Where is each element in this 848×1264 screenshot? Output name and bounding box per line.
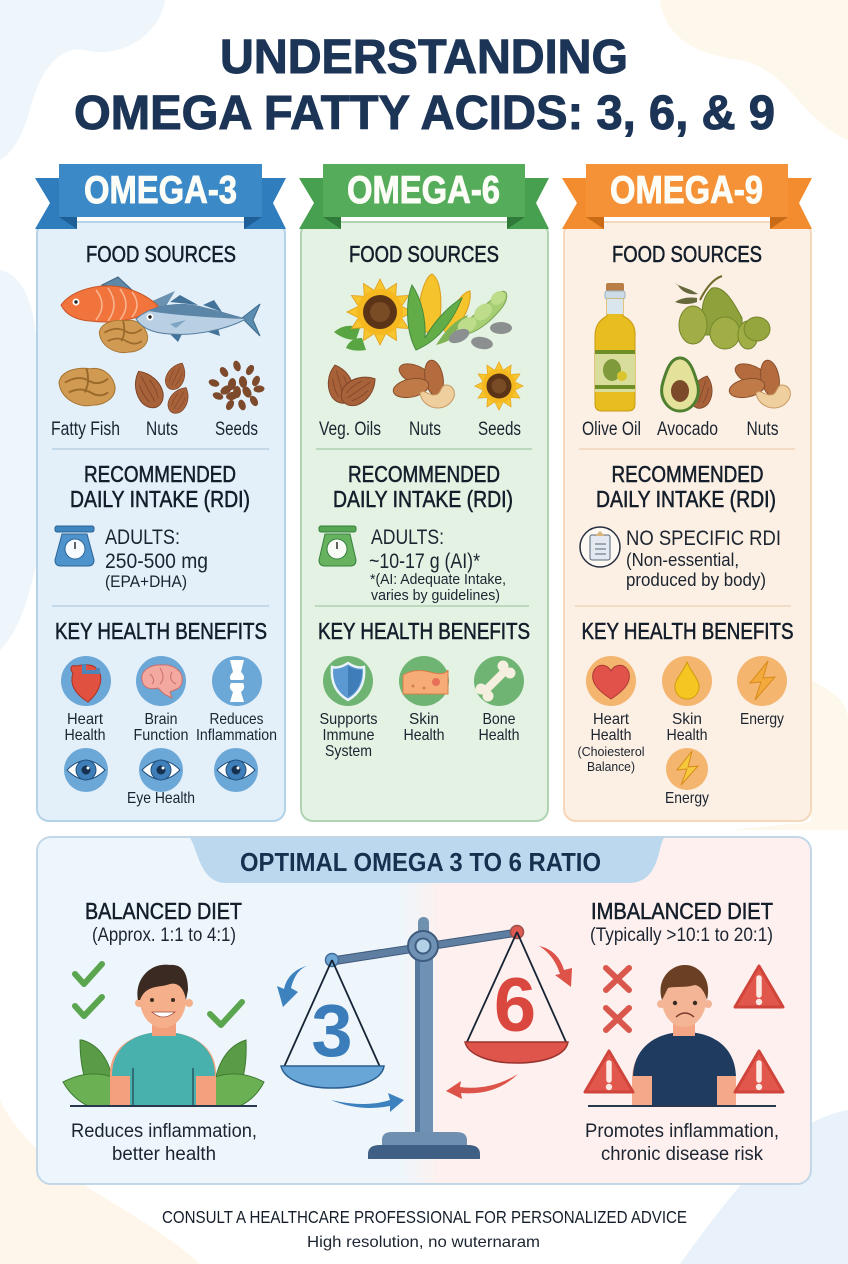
- icon: leaves: [63, 1040, 264, 1106]
- benefit labels: System: [325, 743, 372, 760]
- rdi text: (EPA+DHA): [105, 572, 187, 591]
- icon: joint: [212, 656, 262, 706]
- icon: walnut pile: [99, 320, 148, 353]
- food labels: Veg. Oils: [319, 419, 381, 440]
- heading: recommended daily intake: [70, 461, 250, 512]
- icon: heart: [61, 656, 111, 706]
- icon: energy small: [666, 748, 708, 790]
- food labels: Nuts: [146, 419, 178, 440]
- icon: brain: [136, 656, 186, 706]
- heading: key health benefits: KEY HEALTH BENEFITS: [55, 618, 267, 644]
- heading: food sources: FOOD SOURCES: [612, 241, 762, 267]
- icon: nuts: [728, 359, 790, 408]
- icon: sunflower: [475, 362, 523, 410]
- benefit labels: Supports: [320, 711, 378, 728]
- heading: recommended daily intake: RECOMMENDED: [84, 461, 236, 487]
- ribbon: omega-3: [35, 164, 286, 229]
- heading: key health benefits: KEY HEALTH BENEFITS: [318, 618, 530, 644]
- food labels: Nuts: [746, 419, 778, 440]
- benefit labels: Heart: [593, 711, 630, 728]
- balanced caption: better health: [112, 1144, 216, 1165]
- ribbon: omega-6: [299, 164, 549, 229]
- icons: warning triangles: [585, 966, 783, 1092]
- icon: salmon: [61, 277, 175, 322]
- benefit labels: Inflammation: [196, 727, 277, 744]
- tab: ratio heading: [190, 838, 664, 883]
- footer note: CONSULT A HEALTHCARE PROFESSIONAL FOR PERSONALIZED ADVICE: [162, 1207, 687, 1227]
- rdi text: ADULTS:: [105, 526, 180, 549]
- icons: check marks: [75, 964, 242, 1025]
- benefit labels: [64, 711, 277, 744]
- benefit labels: Health: [404, 727, 444, 744]
- rdi text: ADULTS:: [371, 526, 444, 549]
- imbalanced caption: [585, 1121, 779, 1165]
- panel: omega-6: [299, 164, 549, 821]
- panel: omega ratio: [37, 837, 811, 1184]
- footer note: High resolution, no wuternaram: [307, 1234, 540, 1251]
- heading: food sources: FOOD SOURCES: [86, 241, 236, 267]
- benefit labels: Brain: [144, 711, 178, 728]
- benefit labels: Reduces: [210, 711, 264, 728]
- icon: nuts: [392, 359, 454, 408]
- icon: skin: [399, 656, 449, 706]
- benefit labels: Health: [590, 727, 632, 744]
- icon: walnut: [59, 368, 115, 406]
- heading: food sources: FOOD SOURCES: [349, 241, 499, 267]
- benefit labels: Health: [64, 727, 106, 744]
- label: energy: Energy: [665, 790, 709, 807]
- rdi text: NO SPECIFIC RDI: [626, 527, 781, 550]
- benefit labels: Balance): [587, 759, 635, 774]
- food labels: Seeds: [478, 419, 521, 440]
- ribbon: omega-3: OMEGA-3: [84, 169, 237, 212]
- rdi text: [626, 527, 781, 590]
- heading: recommended daily intake: RECOMMENDED: [612, 461, 764, 487]
- panel: omega-9: [562, 164, 812, 821]
- balanced diet heading: BALANCED DIET: [85, 898, 242, 924]
- icon: bean pod and seeds: [446, 288, 512, 351]
- icons: crosses: [606, 968, 629, 1030]
- heading: recommended daily intake: DAILY INTAKE (RDI): [70, 486, 250, 512]
- benefit labels: Health: [666, 727, 708, 744]
- benefit labels: [320, 711, 520, 760]
- heading: key health benefits: KEY HEALTH BENEFITS: [582, 618, 794, 644]
- balanced diet heading: [85, 898, 242, 946]
- benefit labels: Function: [134, 727, 188, 744]
- benefit labels: Bone: [482, 711, 516, 728]
- benefit labels: Energy: [740, 711, 784, 728]
- icon: weighing scale: [319, 526, 356, 566]
- benefit labels: Health: [478, 727, 520, 744]
- heading: recommended daily intake: RECOMMENDED: [348, 461, 500, 487]
- benefit labels: Heart: [67, 711, 104, 728]
- heading: recommended daily intake: [596, 461, 776, 512]
- icon: unhappy person: [632, 965, 736, 1106]
- imbalanced diet heading: (Typically >10:1 to 20:1): [590, 925, 773, 946]
- right pan: [465, 932, 568, 1063]
- icon: clipboard: [580, 527, 620, 567]
- food labels: [319, 419, 521, 440]
- icon: weighing scale: [55, 526, 94, 566]
- rdi text: *(AI: Adequate Intake,: [370, 572, 506, 588]
- benefit labels: Skin: [672, 711, 702, 728]
- icon: corn: [408, 274, 470, 350]
- label: eye health: Eye Health: [127, 790, 195, 807]
- right pan: 6: [494, 963, 536, 1048]
- heading: recommended daily intake: DAILY INTAKE (RDI): [333, 486, 513, 512]
- rdi text: (Non-essential,: [626, 550, 739, 570]
- icon: nuts: [128, 359, 194, 417]
- benefit labels: Skin: [409, 711, 439, 728]
- rdi text: 250-500 mg: [105, 550, 208, 573]
- tab: ratio heading: OPTIMAL OMEGA 3 TO 6 RATIO: [240, 847, 601, 877]
- icon: seeds: [208, 360, 265, 412]
- left pan: [281, 960, 384, 1088]
- imbalanced caption: Promotes inflammation,: [585, 1121, 779, 1142]
- icon: olive oil bottle: [595, 283, 635, 411]
- ribbon: omega-9: [562, 164, 812, 229]
- icon: happy person: [110, 965, 216, 1106]
- rdi text: [369, 526, 506, 604]
- rdi text: produced by body): [626, 570, 766, 590]
- food labels: [51, 419, 258, 440]
- imbalanced diet heading: IMBALANCED DIET: [591, 898, 773, 924]
- food labels: Avocado: [657, 419, 718, 440]
- icon: energy: [737, 656, 787, 706]
- arrows: blue: [277, 965, 404, 1112]
- ribbon: omega-6: OMEGA-6: [347, 169, 500, 212]
- heading: recommended daily intake: [333, 461, 513, 512]
- title: [74, 31, 775, 140]
- rdi text: ~10-17 g (AI)*: [369, 550, 480, 573]
- ribbon: omega-9: OMEGA-9: [610, 169, 763, 212]
- food labels: Seeds: [215, 419, 258, 440]
- heading: recommended daily intake: DAILY INTAKE (RDI): [596, 486, 776, 512]
- imbalanced diet heading: [590, 898, 773, 946]
- icon: oil drop: [662, 656, 712, 706]
- icon: sunflower with leaves: [334, 279, 413, 351]
- left pan: 3: [311, 989, 353, 1072]
- food labels: Olive Oil: [582, 419, 641, 440]
- title: OMEGA FATTY ACIDS: 3, 6, & 9: [74, 87, 775, 140]
- icon: mackerel: [136, 295, 260, 342]
- icon: heart: [586, 656, 636, 706]
- panel: omega-3: [35, 164, 286, 821]
- food labels: Nuts: [409, 419, 441, 440]
- food labels: [582, 419, 778, 440]
- icon: olives: [675, 276, 770, 349]
- icon: shield: [323, 656, 373, 706]
- imbalanced caption: chronic disease risk: [601, 1144, 763, 1165]
- icons: eyes: [64, 748, 258, 792]
- title: UNDERSTANDING: [220, 31, 628, 84]
- food labels: Fatty Fish: [51, 419, 120, 440]
- balanced caption: Reduces inflammation,: [71, 1121, 257, 1142]
- benefit labels: Immune: [322, 727, 375, 744]
- balanced diet heading: (Approx. 1:1 to 4:1): [92, 925, 236, 946]
- benefit labels: (Choiesterol: [578, 744, 645, 759]
- chart: balance scale: [277, 917, 572, 1159]
- benefit labels: [578, 711, 784, 774]
- icon: almonds: [323, 362, 382, 411]
- icon: bone: [474, 656, 524, 706]
- rdi text: [105, 526, 208, 591]
- arrows: red: [446, 946, 572, 1099]
- balanced caption: [71, 1121, 257, 1165]
- footer note: [162, 1207, 687, 1251]
- rdi text: varies by guidelines): [371, 588, 500, 604]
- icon: avocado: [662, 358, 717, 411]
